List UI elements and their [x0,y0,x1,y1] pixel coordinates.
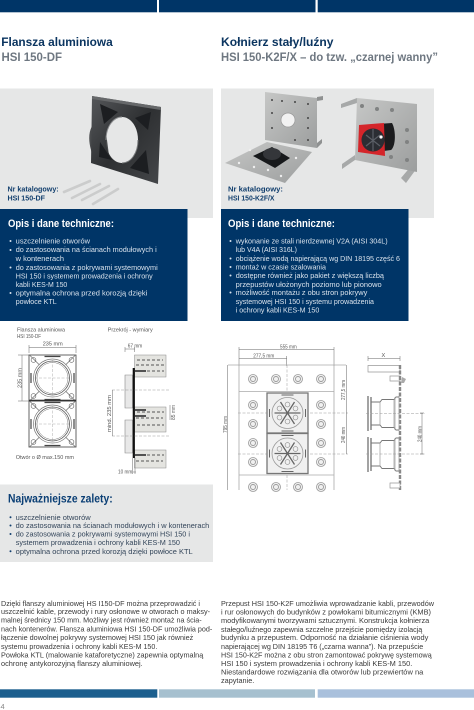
drawing: flange cross-section: 10 mm [118,470,133,476]
panel: left technical data: do zastosowania z pokrywami systemowymi [16,263,158,272]
drawing: flange front view: HSI 150-DF [17,334,41,340]
drawing: flange front view: Otwór o Ø max.150 mm [16,455,74,461]
drawing: flange cross-section: 67 mm [128,344,143,350]
panel: left technical data: do zastosowania na ścianach modułowych i [16,245,157,254]
drawing: flange cross-section: 85 mm [171,405,177,420]
drawing: flange front view: Flansza aluminiowa [17,328,66,334]
panel: right technical data: Opis i dane techniczne: [228,218,335,230]
panel: key advantages: optymalna ochrona przed korozją dzięki powłoce KTL [16,547,193,556]
bottom footer bars [0,689,474,698]
text block: right description: Przepust HSI 150-K2F umożliwia wprowadzanie kabli, przewodów [221,599,435,608]
drawing: collar front view: 795 mm [223,416,229,433]
panel: left technical data: w kontenerach [15,254,64,263]
text block: right description: HSI 150-K2F można z obu stron zamontować pokrywę systemową [221,650,433,660]
panel: right technical data [221,209,408,321]
panel: right technical data: dostępne również jako pakiet z większą liczbą [236,271,385,280]
drawing: collar side section: 240 mm [418,426,424,442]
heading: left product: Flansza aluminiowa [1,35,113,49]
catalogue number: left: Nr katalogowy: [8,186,59,194]
catalogue number: left: HSI 150-DF [8,196,46,202]
panel: right technical data: przepustów ułożonych poziomo lub pionowo [236,280,382,289]
drawing: collar side section: X [382,353,386,359]
panel: key advantages: systemem prowadzenia i ochrony kabli KES-M 150 [16,538,180,547]
text block: left description: systemu prowadzenia i ochrony kabli KES-M 150. [1,642,157,651]
text block: right description: stałego/luźnego zapewnia szczelne przejście pomiędzy izolacją [221,625,423,634]
panel: left technical data: optymalna ochrona przed korozją dzięki [16,288,148,298]
drawing: collar front view: 277,5 mm [253,354,275,360]
panel: left technical data: uszczelnienie otworów [16,236,91,246]
panel: right technical data: możliwość montażu z obu stron pokrywy [236,288,368,297]
panel: left technical data: powłoce KTL [16,297,57,306]
text block: right description [221,599,435,685]
heading: right product: HSI 150-K2F/X – do tzw. „czarnej wanny” [221,50,438,64]
panel: right photo background [221,88,434,218]
panel: right technical data: systemowej HSI 150 i systemu prowadzenia [236,297,375,306]
panel: left technical data: HSI 150 i systemem prowadzenia i ochrony [16,272,153,280]
panel: left technical data: kabli KES-M 150 [16,280,67,289]
text block: right description: Niestandardowe rozwiązania dla otworów lub przewiertów na [221,668,424,676]
drawing: collar side section [366,353,425,490]
panel: right technical data: montaż w czasie szalowania [236,262,327,272]
text block: left description: uszczelnić kable, przewody i rury osłonowe w otworach o maksy- [1,607,211,616]
drawing: collar front view: 555 mm [280,344,297,350]
icon: black aluminium flange photo [89,96,161,184]
text block: left description [1,599,213,668]
text block: right description: modyfikowanymi tworzywami sztucznymi. Konstrukcja kołnierza [221,616,430,625]
icon: fixing rods [64,181,118,204]
panel: right technical data: lub V4A (AISI 316L) [236,245,297,254]
panel: key advantages: Najważniejsze zalety: [8,494,113,506]
text block: left description: łączenie dowolnej pokrywy systemowej HSI 150 jak również [1,633,194,642]
drawing: flange cross-section: mind. 235 mm [107,395,113,432]
drawing: collar front view: 240 mm [341,427,347,443]
text block: left description: malnej średnicy 150 mm. Możliwy jest również montaż na ścia- [1,616,202,624]
text block: right description: napierającej wg DIN 18195 T6 („czarna wanna”). Na przepuście [221,642,423,651]
panel: key advantages: uszczelnienie otworów [16,513,91,522]
drawing: flange front view: 235 mm [17,368,23,388]
drawing: flange cross-section [107,328,177,476]
panel: left technical data: Opis i dane techniczne: [8,218,114,230]
text block: left description: Dzięki flanszy aluminiowej HS I150-DF można przeprowadzić i [1,599,200,608]
panel: right technical data: i ochrony kabli KES-M 150 [236,306,319,314]
panel: key advantages: do zastosowania z pokrywami systemowymi HSI 150 i [16,530,190,538]
catalogue number: right: Nr katalogowy: [228,186,283,194]
panel: left photo background [0,88,213,218]
text block: left description: nach kontenerów. Flansza aluminiowa HSI 150-DF umożliwia pod- [1,624,213,634]
catalogue number: right: HSI 150-K2F/X [228,196,275,202]
heading: left product: HSI 150-DF [2,50,62,64]
text block: left description: ochronę antykorozyjną flanszy aluminiowej. [1,659,143,668]
text block: right description: i rur osłonowych do budynków z powłokami bitumicznymi (KMB) [221,608,431,616]
catalogue number: left [8,186,59,202]
panel: key advantages: do zastosowania na ścianach modułowych i w kontenerach [16,521,209,530]
drawing: flange front view [16,328,76,461]
drawing: collar front view [223,344,348,492]
drawing: collar front view: 277,5 mm [341,380,347,400]
heading: right product [221,35,438,64]
drawing: flange cross-section: Przekrój - wymiary [108,328,153,334]
text block: right description: budynku a przepustem. Odporność na działanie ciśnienia wody [221,633,429,642]
icon: collar photo, plate with red seal [341,98,417,183]
panel: right technical data: obciążenie wodą napierającą wg DIN 18195 część 6 [236,254,400,263]
text block: right description: zapytanie. [221,676,254,685]
top header bars [0,0,474,12]
text block: left description: Powłoka KTL (malowanie kataforetyczne) zapewnia optymalną [1,650,204,660]
panel: right technical data: wykonanie ze stali nierdzewnej V2A (AISI 304L) [235,236,388,246]
heading: left product [1,35,113,64]
panel: key advantages [0,484,213,562]
icon: collar photo, two steel plates [225,92,323,183]
text block: right description: HSI 150 i system prowadzenia i ochrony kabli KES-M 150. [221,659,412,668]
catalogue number: right [228,186,283,202]
heading: right product: Kołnierz stały/luźny [221,35,334,49]
drawing: flange front view: 235 mm [43,342,63,348]
panel: left technical data [0,209,188,321]
